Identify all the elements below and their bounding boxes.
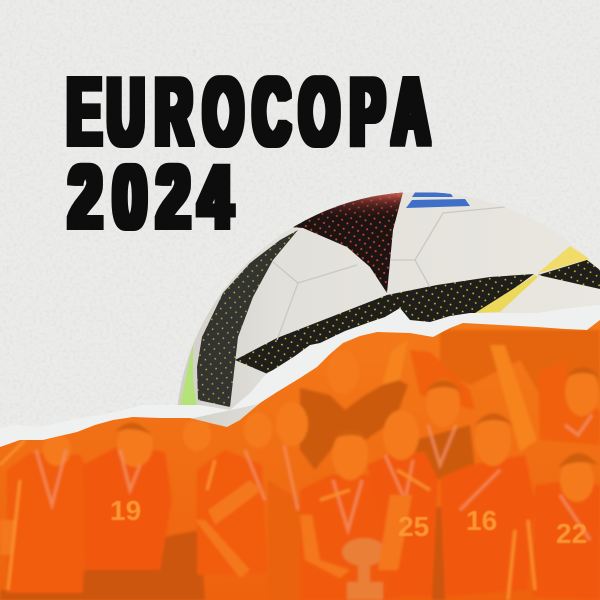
player 22 shirt bbox=[532, 480, 600, 600]
blurred figures bbox=[0, 330, 600, 600]
title line: EUROCOPA: EUROCOPA bbox=[67, 58, 429, 166]
orange background bbox=[0, 310, 600, 600]
black band with yellow dots bbox=[235, 274, 534, 375]
player at trophy shirt bbox=[300, 475, 388, 598]
dark shirt centre bbox=[415, 425, 475, 480]
yellow wedge upper bbox=[538, 246, 590, 273]
dark panel right bbox=[538, 260, 600, 289]
player 25 shirt bbox=[367, 452, 438, 597]
jersey stripes bbox=[0, 440, 535, 600]
right-hand player at edge bbox=[266, 481, 302, 568]
player 2 shirt bbox=[83, 445, 172, 570]
player 16 shirt bbox=[440, 455, 535, 597]
number 25: 25 bbox=[398, 511, 429, 542]
arms foreground bbox=[0, 480, 412, 578]
number 19: 19 bbox=[110, 495, 141, 526]
player 3 shirt bbox=[197, 450, 267, 575]
title: EUROCOPA 2024 bbox=[67, 58, 429, 247]
faces bbox=[42, 372, 600, 503]
dark legs and gaps bbox=[0, 507, 447, 600]
back player shirts bbox=[410, 350, 600, 445]
shirt numbers bbox=[111, 500, 586, 544]
dark shirt of keeper bbox=[300, 378, 408, 470]
left dark dotted panel bbox=[197, 230, 298, 407]
trophy bbox=[342, 538, 386, 600]
ball seams bbox=[273, 207, 505, 340]
torn white paper bbox=[0, 305, 600, 460]
blue stripes bbox=[406, 192, 470, 208]
football bbox=[170, 185, 600, 435]
ball base bbox=[170, 185, 600, 435]
player 1 shirt bbox=[7, 453, 92, 593]
green panel bbox=[180, 343, 197, 407]
yellow wedge lower bbox=[475, 275, 538, 313]
hair bbox=[115, 367, 600, 468]
raised arms bbox=[382, 340, 537, 452]
number 16: 16 bbox=[466, 505, 497, 536]
title line: 2024: 2024 bbox=[69, 148, 232, 247]
top dark panel with red dots bbox=[290, 192, 403, 293]
crowd band bbox=[440, 330, 600, 395]
number 22: 22 bbox=[556, 518, 587, 549]
medal ribbons bbox=[36, 415, 592, 540]
photo: celebrating team in orange duotone bbox=[0, 310, 600, 600]
